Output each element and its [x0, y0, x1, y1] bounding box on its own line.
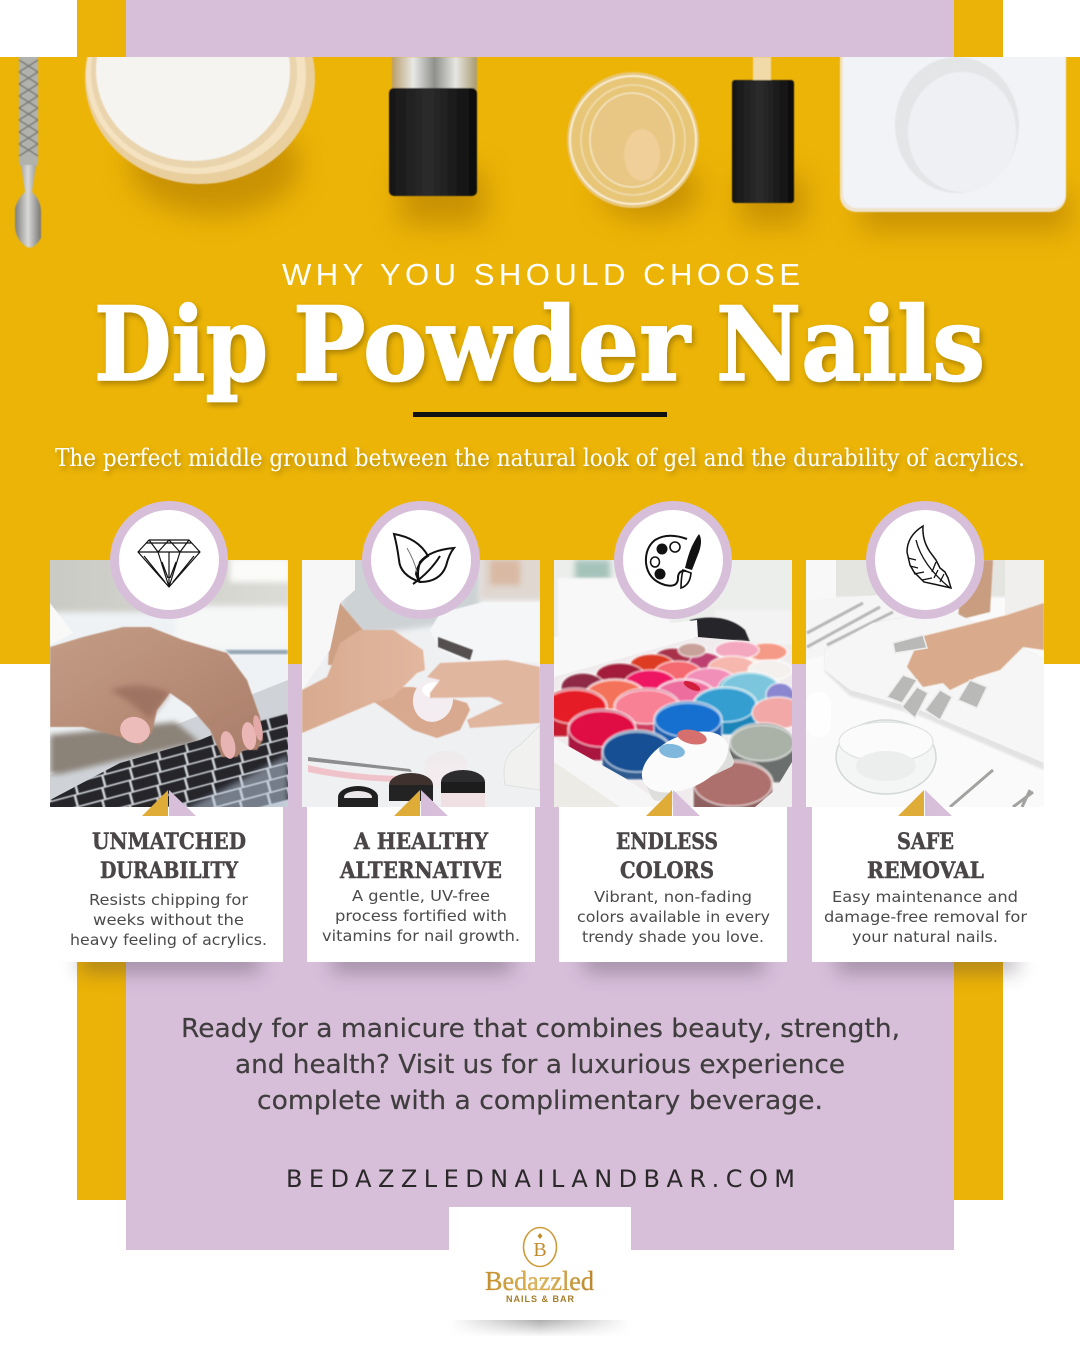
black bottle one: [389, 57, 477, 196]
heading: [339, 829, 502, 884]
description: trendy shade you love.: [582, 928, 764, 946]
logo tagline: NAILS & BAR: [506, 1294, 574, 1304]
icon: artist palette and brush: [618, 506, 728, 614]
card 3: endless colors: [543, 560, 804, 962]
card 1: unmatched durability: [50, 560, 288, 962]
logo: [445, 1207, 635, 1337]
description: [322, 887, 520, 945]
pointer triangles: [394, 790, 448, 816]
main title: Powder: [293, 285, 691, 405]
heading: DURABILITY: [100, 858, 238, 884]
description: process fortified with: [335, 907, 507, 925]
heading: UNMATCHED: [92, 829, 246, 855]
heading: [616, 829, 718, 884]
website: BEDAZZLEDNAILANDBAR.COM: [286, 1165, 795, 1193]
main title: Dip: [94, 285, 268, 405]
text panel: [307, 807, 535, 962]
icon: leaves: [366, 506, 476, 614]
logo emblem: [524, 1228, 556, 1266]
call to action text: and health? Visit us for a luxurious experience: [235, 1050, 845, 1080]
call to action text: [181, 1014, 900, 1116]
heading: REMOVAL: [867, 858, 984, 884]
heading: COLORS: [620, 858, 714, 884]
description: colors available in every: [577, 908, 770, 926]
heading: A HEALTHY: [353, 829, 488, 855]
text panel: [559, 807, 787, 962]
photo: tray of colored powder jars: [554, 560, 792, 807]
pointer triangles: [898, 790, 952, 816]
description: weeks without the: [93, 911, 244, 929]
logo emblem: B: [533, 1239, 547, 1261]
heading: ALTERNATIVE: [339, 858, 502, 884]
glass dish: [567, 72, 699, 208]
call to action text: complete with a complimentary beverage.: [257, 1086, 823, 1116]
text panel: [812, 807, 1040, 962]
logo name: Bedazzled: [485, 1266, 594, 1296]
heading: ENDLESS: [616, 829, 718, 855]
main title: Nails: [716, 285, 985, 405]
description: Easy maintenance and: [832, 888, 1018, 906]
main title: [94, 285, 985, 405]
call to action text: Ready for a manicure that combines beauty, strength,: [181, 1014, 900, 1044]
description: Resists chipping for: [89, 891, 249, 909]
pointer triangles: [142, 790, 196, 816]
eyebrow heading: WHY YOU SHOULD CHOOSE: [282, 257, 800, 292]
card 4: safe removal: [800, 555, 1050, 962]
photo: hands holding a cream jar: [302, 550, 545, 810]
heading: [92, 829, 246, 884]
icon: diamond: [114, 506, 224, 614]
description: heavy feeling of acrylics.: [70, 931, 267, 949]
description: [70, 891, 267, 949]
text panel: [55, 807, 283, 962]
description: Vibrant, non-fading: [594, 888, 752, 906]
shadows of hero objects: [130, 115, 1070, 230]
photo: hand on laptop keyboard: [50, 560, 288, 807]
powder jar: [84, 57, 316, 185]
card shadows: [80, 950, 1017, 972]
icon: feather: [870, 506, 980, 614]
black bottle two: [732, 57, 794, 203]
description: your natural nails.: [852, 928, 998, 946]
photo: foil wrapped fingers on towel: [800, 555, 1050, 807]
title underline: [413, 412, 667, 417]
heading: [867, 829, 984, 884]
card 2: a healthy alternative: [302, 550, 545, 962]
cuticle pusher tool: [15, 50, 41, 248]
hero photo: nail tools on yellow: [0, 0, 1080, 664]
description: vitamins for nail growth.: [322, 927, 520, 945]
description: damage-free removal for: [824, 908, 1028, 926]
white palette tray: [840, 40, 1066, 212]
description: [824, 888, 1028, 946]
description: [577, 888, 770, 946]
pointer triangles: [646, 790, 700, 816]
heading: SAFE: [897, 829, 954, 855]
description: A gentle, UV-free: [352, 887, 490, 905]
